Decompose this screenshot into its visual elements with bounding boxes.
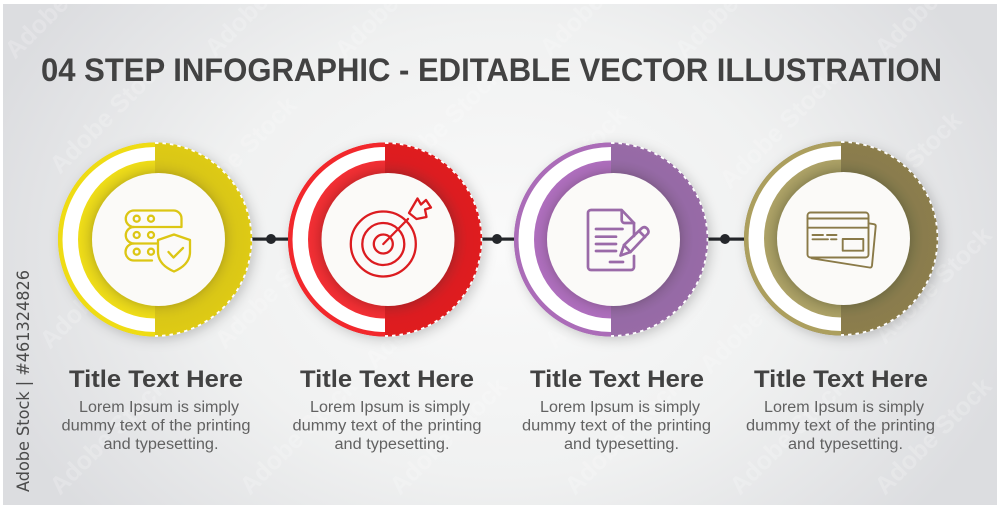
step 4 text: and typesetting.: [788, 436, 903, 453]
step 4 text: Lorem Ipsum is simply: [764, 399, 924, 416]
watermark pattern: Adobe Stock: [714, 66, 842, 194]
step 4 text: Title Text Here: [754, 366, 928, 393]
step 3 text: [522, 366, 711, 453]
watermark pattern: Adobe Stock: [379, 61, 507, 189]
step 2 text: [292, 366, 482, 453]
step 2 text: Title Text Here: [300, 366, 474, 393]
step 1 circle: [58, 142, 252, 336]
watermark pattern: Adobe Stock: [34, 226, 162, 354]
watermark pattern: Adobe Stock: [44, 51, 172, 179]
step 4 circle: [744, 142, 938, 336]
step 2 text: and typesetting.: [334, 436, 450, 453]
icon: server with shield: [126, 210, 190, 272]
step 4 text: dummy text of the printing: [746, 418, 935, 434]
step 1 text: dummy text of the printing: [62, 418, 250, 434]
step 2 circle: [288, 142, 482, 336]
step 3 circle: [514, 142, 708, 336]
step 4 text: [746, 366, 935, 453]
watermark pattern: Adobe Stock: [209, 226, 337, 354]
step 3 text: Title Text Here: [530, 366, 704, 393]
step 1 text: [62, 366, 250, 453]
watermark pattern: Adobe Stock: [359, 246, 487, 374]
step 3 text: Lorem Ipsum is simply: [540, 399, 700, 416]
watermark pattern: Adobe Stock: [384, 372, 512, 500]
step 2 text: dummy text of the printing: [292, 418, 482, 434]
title: 04 STEP INFOGRAPHIC - EDITABLE VECTOR ILLUSTRATION: [41, 52, 942, 88]
watermark pattern: Adobe Stock: [869, 221, 997, 349]
icon: document with pen: [588, 210, 648, 270]
step 3 text: and typesetting.: [564, 436, 679, 453]
stock id side label: Adobe Stock | #461324826: [14, 270, 34, 492]
step 1 text: Lorem Ipsum is simply: [79, 399, 239, 416]
connector 2 to 3: [480, 234, 515, 244]
step 1 text: Title Text Here: [69, 366, 243, 393]
watermark pattern: Adobe Stock: [44, 372, 172, 500]
watermark pattern: Adobe Stock: [559, 372, 687, 500]
watermark pattern: Adobe Stock: [869, 372, 997, 500]
watermark pattern: Adobe Stock: [539, 226, 667, 354]
step 2 text: Lorem Ipsum is simply: [310, 399, 470, 416]
connector 1 to 2: [250, 234, 290, 244]
icon: target with arrow: [351, 198, 431, 276]
watermark pattern: Adobe Stock: [694, 251, 822, 379]
step 1 text: and typesetting.: [104, 436, 218, 453]
watermark pattern: Adobe Stock: [174, 91, 302, 219]
watermark pattern: Adobe Stock: [504, 101, 632, 229]
connectors: [250, 234, 745, 244]
icon: credit cards: [808, 212, 876, 268]
watermark pattern: Adobe Stock: [839, 106, 967, 234]
watermark pattern: Adobe Stock: [234, 372, 362, 500]
connector 3 to 4: [705, 234, 745, 244]
step 3 text: dummy text of the printing: [522, 418, 711, 434]
watermark pattern: Adobe Stock: [724, 372, 852, 500]
